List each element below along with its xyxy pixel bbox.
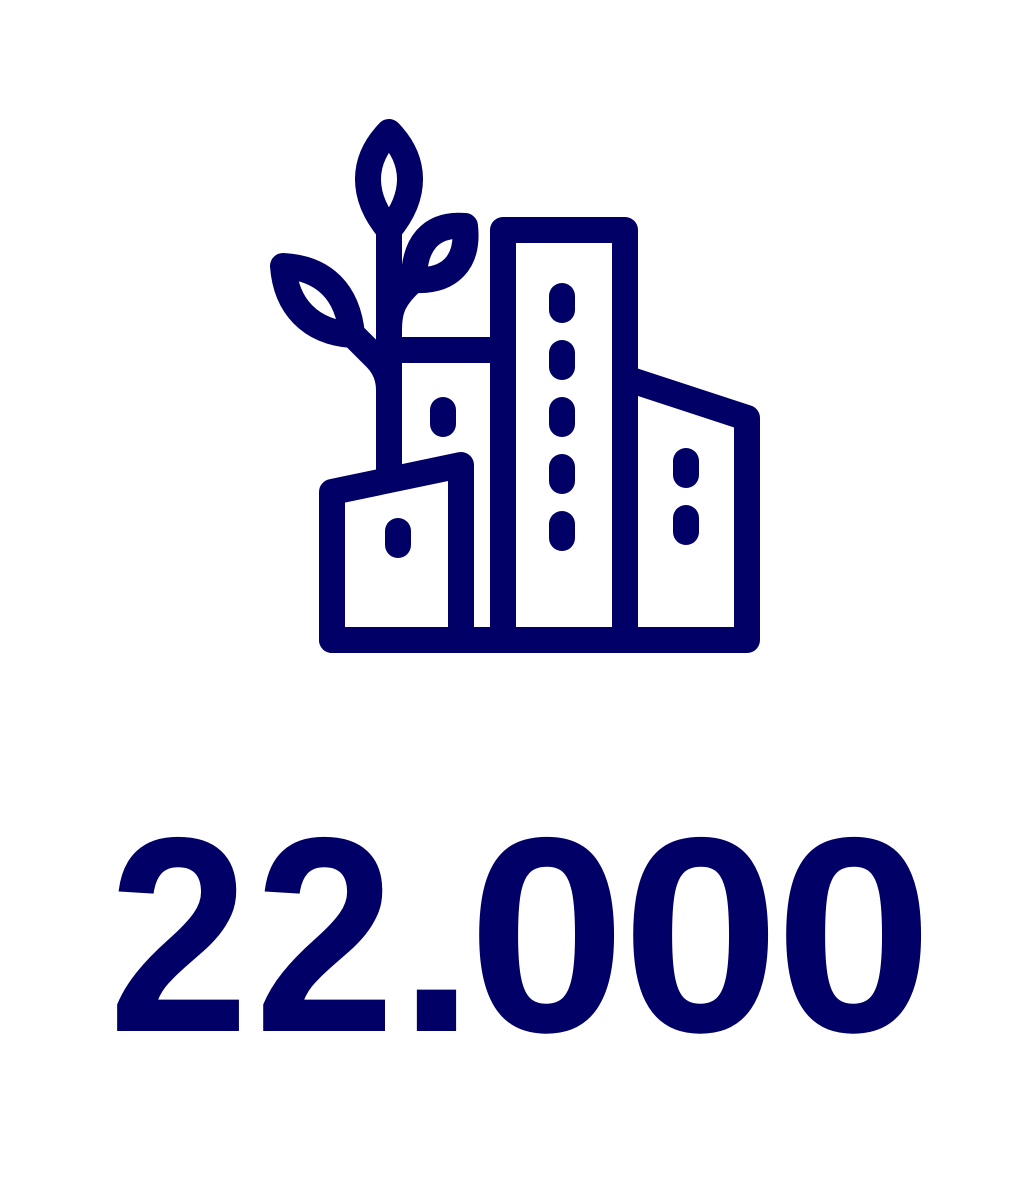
number: 000 (468, 780, 933, 1090)
right leaf (414, 226, 466, 280)
front left building (332, 465, 461, 640)
back left building (389, 350, 503, 470)
number: . (398, 779, 475, 1090)
tall central building (503, 230, 625, 640)
right building (332, 378, 747, 640)
number (108, 779, 933, 1091)
icon: buildings with plant (283, 132, 747, 640)
windows (398, 296, 686, 545)
plant stem (352, 230, 410, 390)
number: 22 (108, 780, 395, 1091)
top leaf (368, 132, 410, 230)
left leaf (283, 266, 352, 335)
